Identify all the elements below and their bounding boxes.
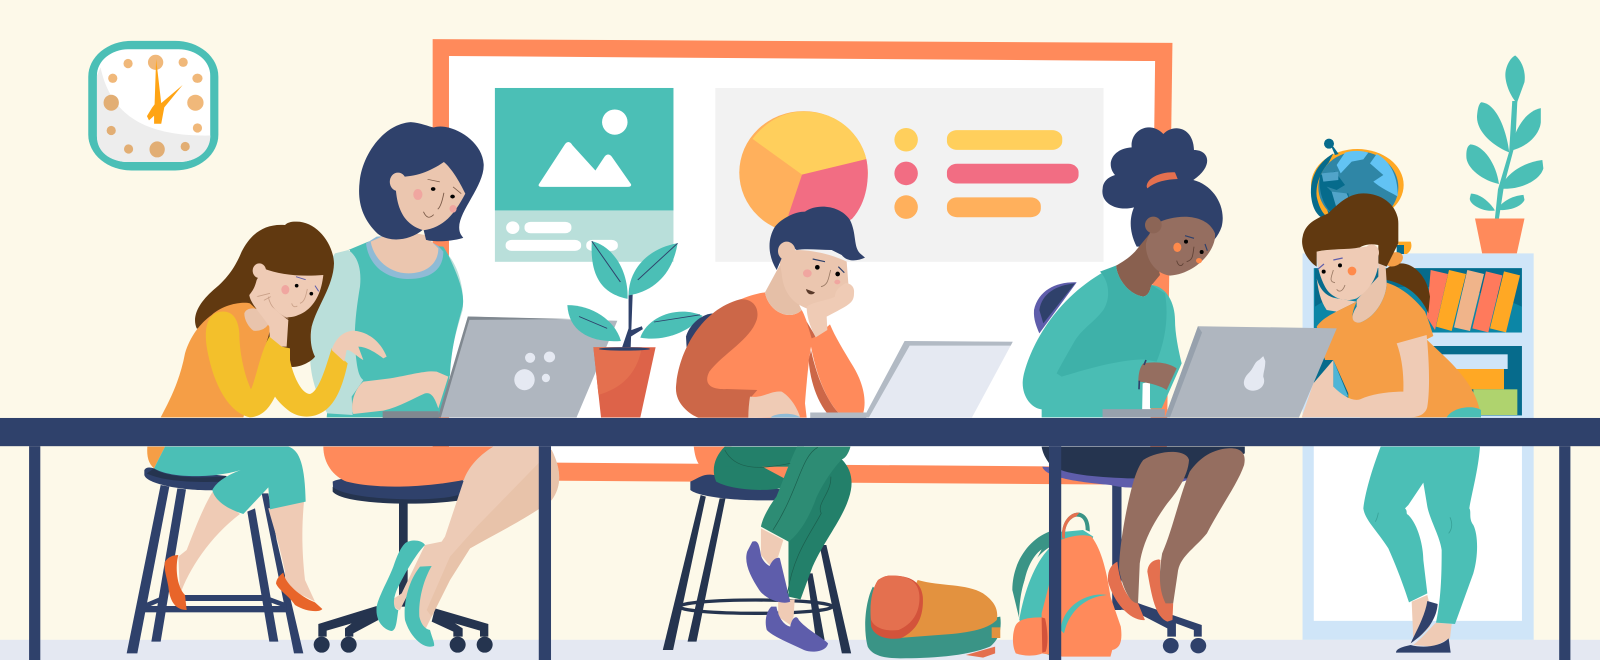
left girl upper body — [161, 222, 387, 417]
woman in teal lower body — [314, 447, 559, 653]
boy lower body — [663, 447, 852, 653]
plant on table — [567, 241, 703, 418]
forearm — [249, 295, 288, 347]
woman in teal upper body — [310, 230, 463, 417]
face — [1317, 246, 1378, 300]
potted plant on shelf — [1466, 56, 1543, 253]
shoe front — [405, 566, 434, 647]
floor — [0, 640, 1600, 660]
shoe upper — [746, 541, 790, 603]
torso — [677, 292, 865, 418]
forearm — [352, 371, 448, 414]
pencil — [1139, 360, 1146, 389]
hair band — [1147, 172, 1178, 188]
shelf contents and globe — [1311, 139, 1522, 415]
neck — [1116, 233, 1160, 297]
books — [1333, 270, 1520, 415]
hand under cheek — [1317, 278, 1357, 312]
pants — [1363, 447, 1480, 624]
shirt — [161, 303, 272, 417]
back of shirt — [147, 447, 165, 468]
face — [778, 250, 848, 308]
pie chart — [739, 111, 868, 234]
ankles — [1412, 595, 1452, 647]
legs — [1119, 452, 1189, 603]
legs — [392, 447, 559, 630]
laptop 1 — [383, 317, 617, 418]
arm shade — [807, 322, 838, 413]
right sleeve — [433, 255, 463, 370]
skirt — [323, 447, 493, 487]
shoe back — [376, 541, 425, 631]
neck — [1353, 263, 1387, 323]
left sleeve — [310, 250, 363, 415]
neck — [765, 262, 802, 315]
sleeves — [206, 312, 348, 417]
legend dots and bars — [894, 128, 1079, 219]
sweater shade — [1057, 266, 1167, 377]
logo — [1244, 356, 1265, 391]
waistband — [1447, 407, 1481, 417]
laptop 3 — [1103, 326, 1337, 418]
chair — [314, 475, 493, 653]
boy upper body — [676, 207, 865, 418]
dark-skinned girl upper body — [1023, 127, 1223, 417]
face — [249, 268, 323, 317]
hair — [359, 122, 484, 241]
girl on right legs — [1363, 447, 1480, 653]
pants — [154, 447, 306, 514]
hair — [1302, 193, 1398, 267]
chair back — [1034, 282, 1077, 333]
panel: image card — [495, 88, 673, 262]
girl on right upper body — [1302, 193, 1481, 417]
hair — [195, 222, 334, 367]
backpack — [1012, 513, 1121, 657]
globe — [1311, 139, 1411, 254]
hand on mouse — [748, 391, 800, 418]
stool — [127, 468, 303, 653]
hair — [1102, 127, 1223, 247]
dress — [327, 242, 463, 417]
ankles — [761, 528, 795, 625]
shirt — [1317, 283, 1481, 417]
pants dark — [714, 447, 852, 599]
woman head — [359, 122, 484, 241]
hair — [770, 207, 865, 270]
right shoe — [276, 573, 322, 611]
neck — [244, 308, 270, 331]
legs — [178, 492, 240, 595]
arm — [1302, 335, 1429, 417]
left girl lower body — [127, 447, 322, 653]
leaves — [567, 241, 703, 341]
bag and backpack with girl legs — [865, 447, 1245, 658]
face — [1146, 217, 1215, 276]
clock — [88, 41, 218, 170]
bookshelf and tall plant — [1303, 56, 1543, 640]
chair back — [686, 313, 713, 348]
left shoe — [165, 555, 187, 610]
hand under chin — [807, 283, 854, 337]
face — [395, 162, 465, 230]
neck — [371, 230, 438, 273]
hand — [332, 331, 387, 362]
ponytail — [1385, 263, 1430, 313]
shoe front — [1396, 638, 1451, 653]
stool — [663, 475, 851, 653]
shirt hem — [694, 447, 732, 475]
shoe back — [1411, 601, 1438, 643]
chair — [1042, 467, 1206, 653]
collar — [366, 233, 443, 279]
shoe lower — [766, 607, 828, 652]
shelf shadow — [1315, 268, 1522, 307]
bookshelf — [1303, 253, 1534, 640]
hand — [1138, 362, 1177, 390]
shoes — [1108, 562, 1145, 620]
pants light — [761, 447, 850, 542]
laptop 2 — [810, 341, 1013, 418]
shorts — [1042, 447, 1245, 478]
table — [0, 418, 1600, 660]
sleeve shade — [676, 299, 758, 418]
sweater — [1023, 266, 1182, 417]
pot — [593, 347, 656, 418]
whiteboard — [433, 39, 1172, 485]
panel: chart card — [715, 88, 1104, 262]
duffel bag — [865, 576, 1001, 658]
